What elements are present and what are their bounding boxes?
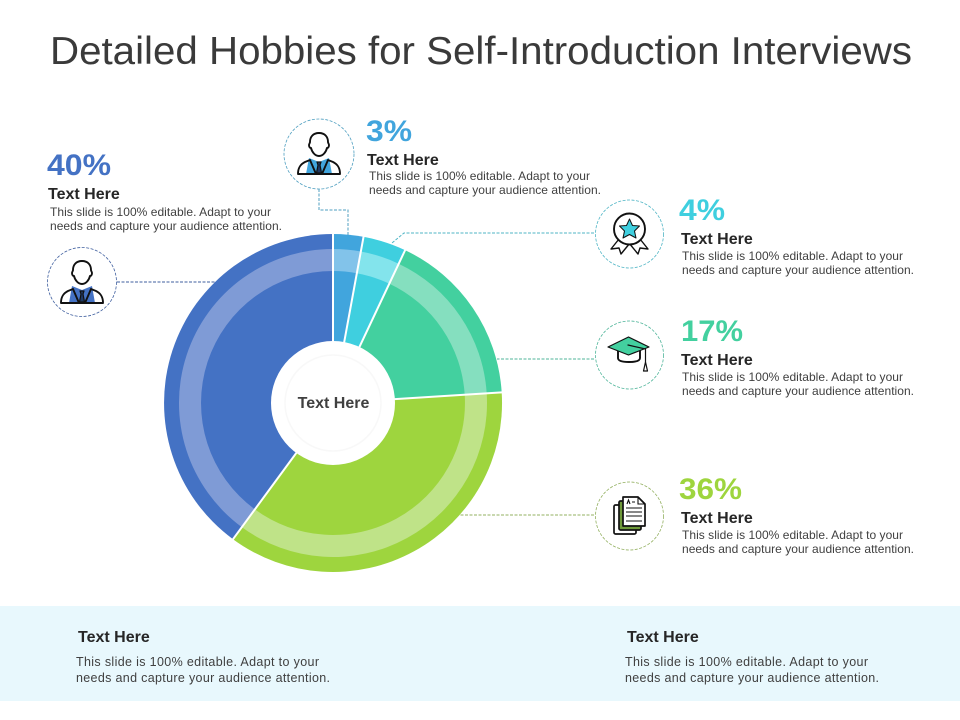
icon: graduation cap [596, 321, 664, 389]
segment: 40% [164, 234, 333, 539]
callout: 40%: This slide is 100% editable. Adapt to your [50, 205, 271, 219]
callout: 17% [681, 315, 914, 398]
callout: 36%: Text Here [681, 510, 753, 527]
callout: 40%: Text Here [48, 186, 120, 203]
segment: 17% [333, 250, 502, 403]
callout: 4%: This slide is 100% editable. Adapt to your [682, 249, 903, 263]
callout: 17%: needs and capture your audience attention. [682, 384, 914, 398]
center label: Text Here [298, 395, 369, 412]
callout: 4%: 4% [679, 194, 725, 227]
callout: 36%: needs and capture your audience attention. [682, 542, 914, 556]
footer text left: needs and capture your audience attention. [76, 671, 330, 685]
callout: 36%: 36% [679, 473, 742, 506]
icon: person in light blue tie [284, 119, 354, 189]
footer band [0, 606, 960, 701]
callout: 3%: Text Here [367, 152, 439, 169]
icon: award ribbon [596, 200, 664, 268]
footer text right: needs and capture your audience attention. [625, 671, 879, 685]
callout: 36% [679, 473, 914, 556]
footer text right: This slide is 100% editable. Adapt to your [625, 655, 868, 669]
callout: 3%: 3% [366, 115, 412, 148]
segment: 3% [333, 234, 364, 403]
donut chart [164, 232, 504, 572]
callout: 40%: needs and capture your audience attention. [50, 219, 282, 233]
footer text left [76, 629, 330, 685]
callout: 17%: This slide is 100% editable. Adapt to your [682, 370, 903, 384]
callout: 4%: needs and capture your audience attention. [682, 263, 914, 277]
footer text right: Text Here [627, 629, 699, 646]
footer text left: Text Here [78, 629, 150, 646]
icon: person in blue tie [48, 248, 116, 316]
callout: 4% [679, 194, 914, 277]
callout: 3%: needs and capture your audience attention. [369, 183, 601, 197]
icon: stacked documents [596, 482, 664, 550]
callout: 17%: Text Here [681, 352, 753, 369]
segment: 36% [233, 392, 502, 572]
connector lines [117, 189, 594, 515]
callout: 17%: 17% [681, 315, 743, 348]
callout: 3% [366, 115, 601, 197]
callout: 4%: Text Here [681, 231, 753, 248]
footer text left: This slide is 100% editable. Adapt to your [76, 655, 319, 669]
callout: 36%: This slide is 100% editable. Adapt to your [682, 528, 903, 542]
segment: 4% [333, 237, 405, 403]
center label [271, 341, 395, 465]
callout: 40% [47, 149, 282, 233]
footer text right [625, 629, 879, 685]
callout: 40%: 40% [47, 149, 111, 182]
callout: 3%: This slide is 100% editable. Adapt to your [369, 169, 590, 183]
title: Detailed Hobbies for Self-Introduction Interviews [50, 30, 912, 73]
